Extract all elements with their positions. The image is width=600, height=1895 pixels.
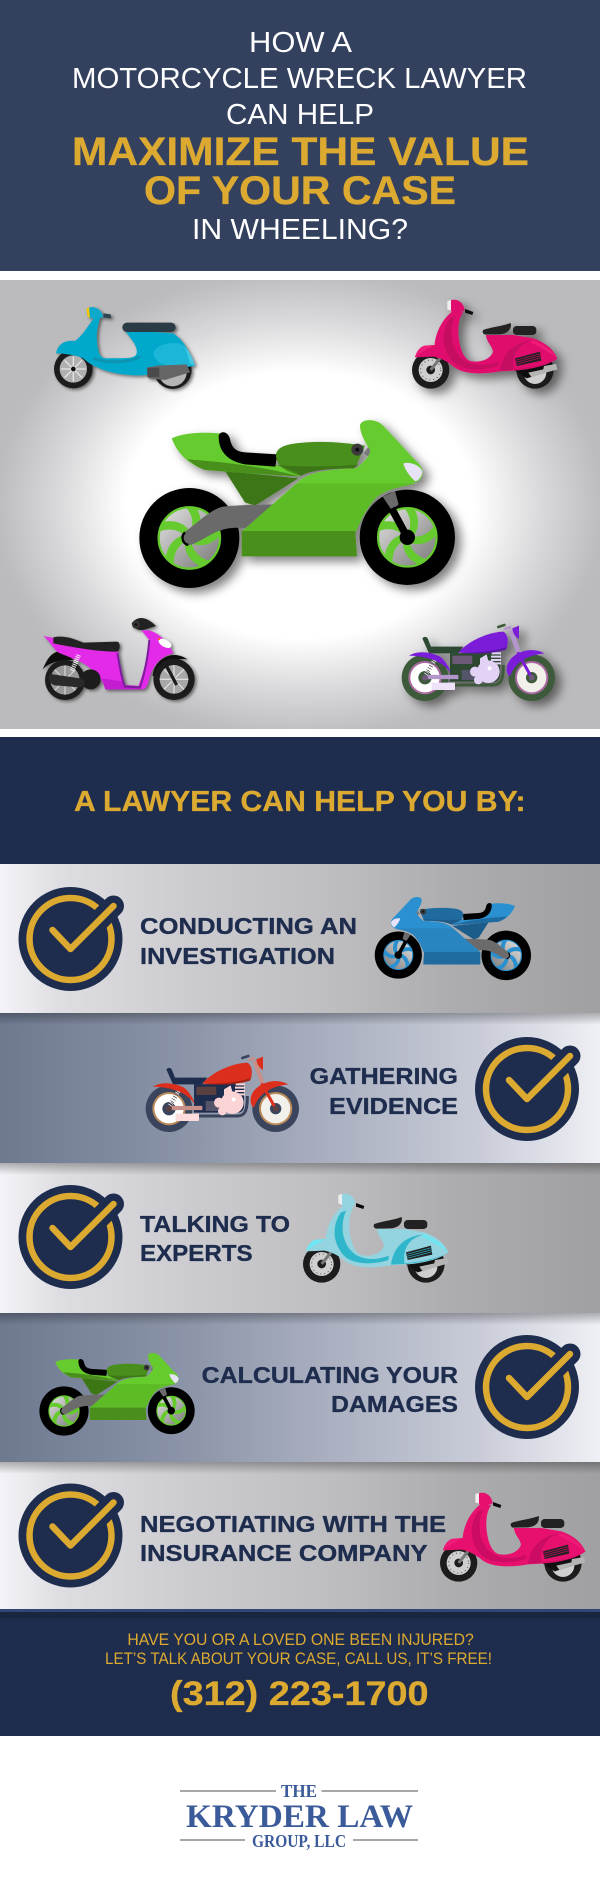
call to action text: LET’S TALK ABOUT YOUR CASE, CALL US, IT’S FREE! xyxy=(105,1650,492,1668)
title lines: MOTORCYCLE WRECK LAWYER xyxy=(72,63,527,95)
icon: blue sport motorcycle xyxy=(375,897,531,980)
row label: EXPERTS xyxy=(140,1240,253,1266)
row label: INSURANCE COMPANY xyxy=(140,1540,428,1566)
row label xyxy=(202,1362,458,1417)
icon: aqua scooter xyxy=(303,1194,448,1283)
call to action text: HAVE YOU OR A LOVED ONE BEEN INJURED? xyxy=(127,1631,474,1649)
icon: purple cruiser motorcycle xyxy=(402,625,555,701)
row label: EVIDENCE xyxy=(329,1093,458,1119)
icon: blue scooter xyxy=(54,307,195,389)
panel: conducting an investigation xyxy=(0,864,600,1013)
icon: pink scooter xyxy=(412,300,557,389)
icon: checkmark badge xyxy=(475,1335,579,1439)
panel: calculating your damages xyxy=(0,1313,600,1462)
row label: CALCULATING YOUR xyxy=(202,1362,458,1388)
logo: Kryder Law Group: THE xyxy=(281,1781,317,1801)
row label xyxy=(140,1211,290,1266)
icon: green sport motorcycle xyxy=(139,420,455,588)
row label: GATHERING xyxy=(310,1063,458,1089)
icon: magenta scooter xyxy=(43,618,195,700)
title lines: HOW A xyxy=(249,27,353,59)
row label: INVESTIGATION xyxy=(140,943,335,969)
row label xyxy=(140,1511,446,1566)
logo: Kryder Law Group: GROUP, LLC xyxy=(252,1831,346,1851)
title lines: CAN HELP xyxy=(226,99,374,131)
row label: CONDUCTING AN xyxy=(140,913,357,939)
logo: Kryder Law Group: KRYDER LAW xyxy=(186,1799,413,1835)
phone number: (312) 223-1700 xyxy=(170,1675,429,1713)
title lines xyxy=(72,27,529,246)
panel: call to action xyxy=(0,1609,600,1736)
icon: red cruiser motorcycle xyxy=(146,1056,299,1132)
row label: DAMAGES xyxy=(331,1391,458,1417)
row label xyxy=(140,913,357,969)
panel: motorcycles spotlight xyxy=(0,280,600,729)
icon: checkmark badge xyxy=(18,887,122,991)
panel: gathering evidence xyxy=(0,1013,600,1163)
logo: Kryder Law Group xyxy=(180,1781,418,1851)
title lines: OF YOUR CASE xyxy=(144,169,456,213)
icon: checkmark badge xyxy=(18,1185,122,1289)
icon: checkmark badge xyxy=(475,1037,579,1141)
panel: lawyer help heading xyxy=(0,737,600,864)
call to action text xyxy=(105,1631,492,1668)
icon: checkmark badge xyxy=(18,1484,122,1588)
icon: green sport motorcycle small xyxy=(39,1353,195,1436)
panel: title header xyxy=(0,0,600,271)
row label: NEGOTIATING WITH THE xyxy=(140,1511,446,1537)
icon: pink scooter small xyxy=(440,1493,585,1582)
panel: talking to experts xyxy=(0,1163,600,1313)
row label xyxy=(310,1063,458,1119)
section heading: A LAWYER CAN HELP YOU BY: xyxy=(74,786,526,818)
title lines: MAXIMIZE THE VALUE xyxy=(72,130,529,174)
title lines: IN WHEELING? xyxy=(192,214,408,246)
panel: negotiating with the insurance company xyxy=(0,1462,600,1609)
row label: TALKING TO xyxy=(140,1211,290,1237)
